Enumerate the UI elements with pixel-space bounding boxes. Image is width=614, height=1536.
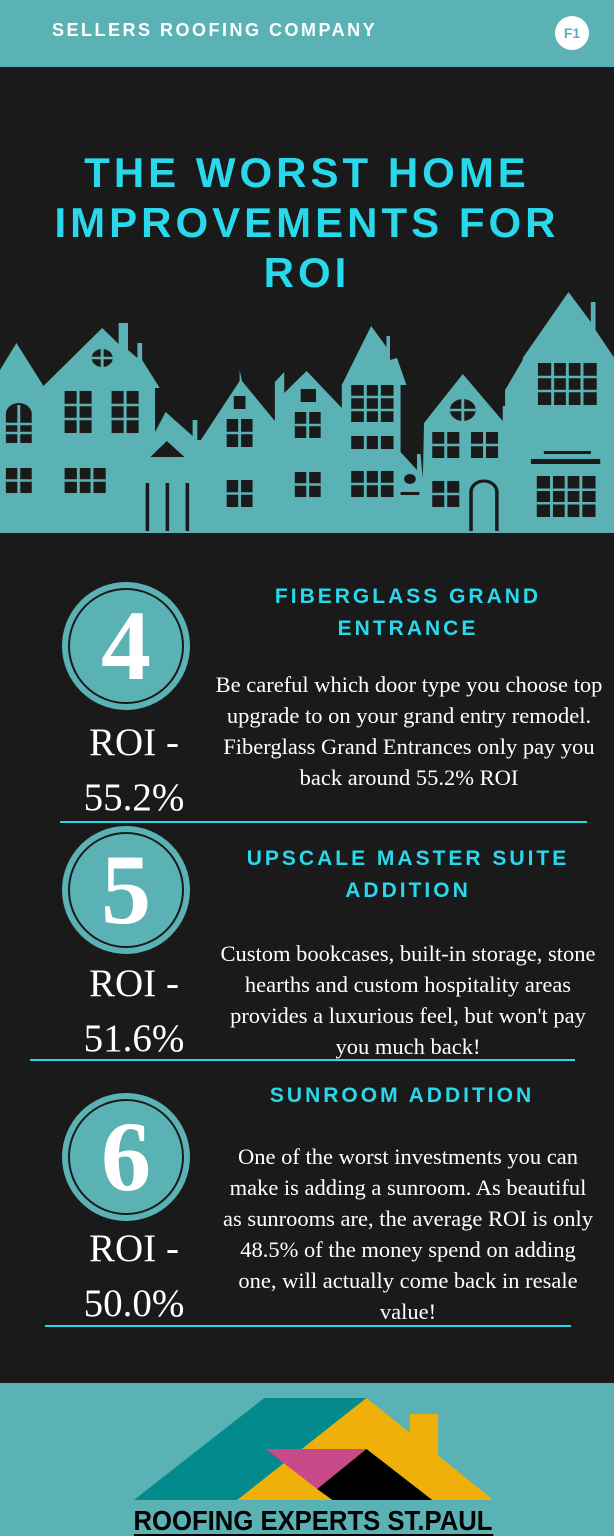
title: ROI (264, 249, 350, 296)
circle 6 (62, 1093, 190, 1221)
footer (0, 1383, 614, 1536)
heading 5: UPSCALE MASTER SUITE (247, 847, 569, 870)
roi 6 (84, 1227, 184, 1325)
title (54, 149, 560, 296)
text 6: 48.5% of the money spend on adding (240, 1237, 576, 1262)
text 4: Be careful which door type you choose top upgrade to on your grand entry remodel. Fiberglass Grand Entrances only pay you back around 55.2% ROI (216, 672, 602, 790)
badge F1 (555, 16, 589, 50)
text 5: Custom bookcases, built-in storage, stone hearths and custom hospitality areas provides a luxurious feel, but won't pay you much back! (221, 941, 595, 1059)
title: THE WORST HOME (84, 149, 530, 196)
logo text: ROOFING EXPERTS ST.PAUL (134, 1505, 492, 1536)
houses skyline illustration (0, 292, 614, 533)
text 6: One of the worst investments you can (238, 1144, 578, 1169)
item 5 (62, 826, 595, 1060)
circle 4: 4 (101, 590, 151, 701)
company name: SELLERS ROOFING COMPANY (52, 20, 377, 40)
roi 4: 55.2% (84, 776, 184, 819)
text 6: as sunrooms are, the average ROI is only (223, 1206, 593, 1231)
roi 6: ROI - (89, 1227, 179, 1270)
roi 4 (84, 721, 184, 819)
item 4 (62, 582, 602, 819)
roi 5: ROI - (89, 962, 179, 1005)
top bar (0, 0, 614, 67)
text 6: make is adding a sunroom. As beautiful (230, 1175, 586, 1200)
title: IMPROVEMENTS FOR (54, 199, 560, 246)
circle 4 (62, 582, 190, 710)
text 6: value! (380, 1299, 436, 1324)
circle 5 (62, 826, 190, 954)
roi 6: 50.0% (84, 1282, 184, 1325)
roi 5: 51.6% (84, 1017, 184, 1060)
text 6: one, will actually come back in resale (238, 1268, 578, 1293)
heading 4 (275, 585, 541, 640)
heading 5 (247, 847, 569, 902)
circle 5: 5 (101, 834, 151, 945)
logo (134, 1398, 494, 1536)
roi 4: ROI - (89, 721, 179, 764)
heading 4: ENTRANCE (338, 617, 478, 640)
roi 5 (84, 962, 184, 1060)
item 6 (62, 1084, 593, 1325)
badge F1: F1 (564, 25, 580, 41)
circle 6: 6 (101, 1101, 151, 1212)
text 6 (223, 1144, 593, 1324)
heading 5: ADDITION (345, 879, 471, 902)
heading 4: FIBERGLASS GRAND (275, 585, 541, 608)
heading 6: SUNROOM ADDITION (270, 1084, 534, 1107)
